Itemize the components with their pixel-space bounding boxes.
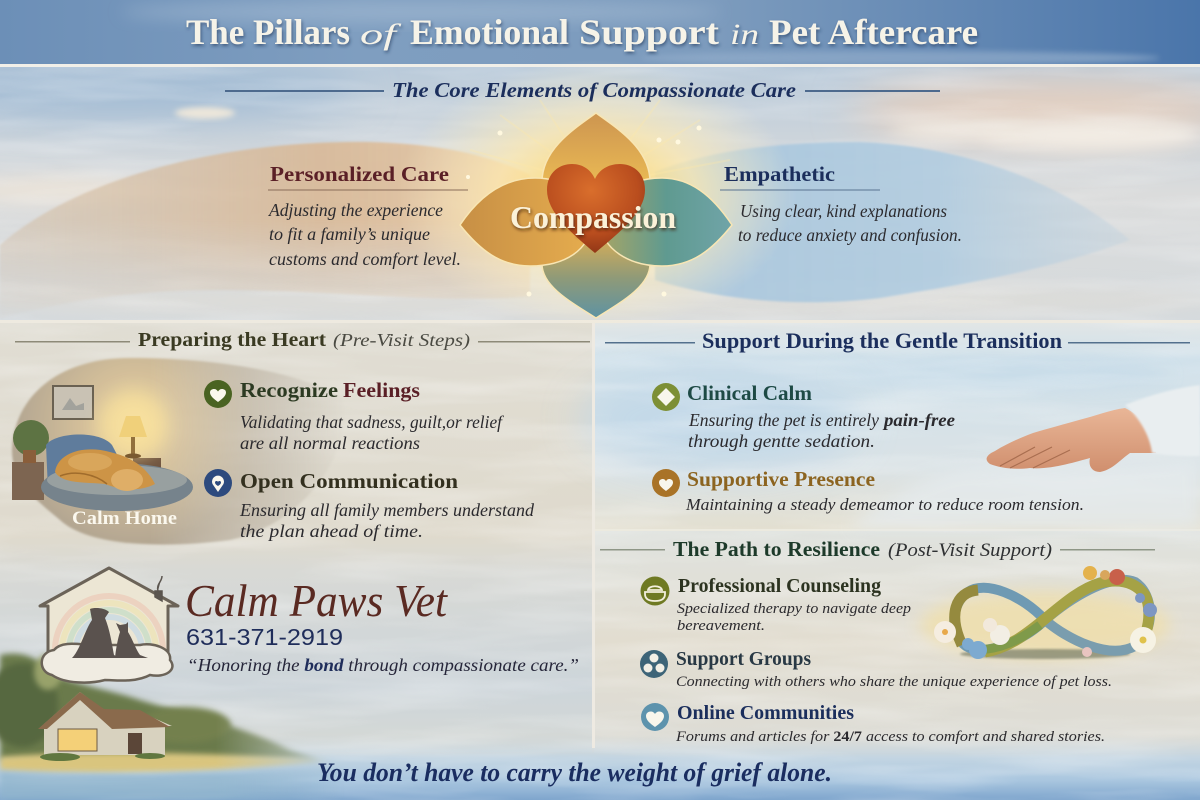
title: Pet Aftercare (769, 12, 978, 52)
title banner (0, 0, 1200, 67)
label: compassion: Compassion (510, 199, 676, 235)
icon: golden glow (396, 60, 796, 330)
icon: supportive presence (652, 469, 680, 497)
item: professional counseling: bereavement. (677, 618, 765, 634)
illustration: hand on blanket (850, 385, 1200, 528)
logo: calm paws house (40, 568, 178, 683)
label: calm home: Calm Home (72, 508, 177, 529)
item: recognize feelings: Validating that sadness, guilt,or relief (240, 412, 504, 432)
rainbow (55, 596, 163, 650)
tagline: “Honoring the bond through compassionate care.” (187, 655, 579, 675)
heading: path to resilience: (Post-Visit Support) (888, 541, 1052, 561)
title: of (360, 18, 402, 51)
illustration: landscape with trees (0, 654, 340, 800)
item: recognize feelings: Recognize (240, 378, 338, 402)
cat on roof (155, 576, 162, 601)
heading: path to resilience: The Path to Resilience (673, 537, 880, 561)
brand: calm paws vet (185, 575, 579, 675)
panel edges (0, 320, 1200, 748)
item: professional counseling: Professional Counseling (678, 576, 881, 597)
item: recognize feelings (240, 378, 504, 453)
title: The Pillars (186, 12, 350, 52)
small dog (115, 622, 148, 658)
heading: preparing the heart: (Pre-Visit Steps) (333, 330, 470, 351)
hand (987, 408, 1156, 472)
item: recognize feelings: are all normal reactions (240, 433, 420, 453)
plant (13, 420, 49, 463)
item: professional counseling: Specialized therapy to navigate deep (677, 601, 912, 617)
panel: path to resilience background (594, 531, 1200, 753)
item: support groups: Support Groups (676, 649, 811, 670)
petal: bottom (542, 238, 650, 318)
illustration: floral infinity (920, 566, 1170, 659)
item: support groups: Connecting with others who share the unique experience of pet loss. (676, 674, 1112, 690)
title: in (730, 18, 759, 51)
picture frame (53, 386, 93, 419)
petal: right (600, 178, 732, 266)
house (40, 568, 178, 658)
item: recognize feelings: Feelings (343, 378, 420, 402)
lamp (99, 391, 167, 459)
icon: clinical calm (652, 383, 680, 411)
item: clinical calm: Ensuring the pet is entirely (688, 410, 879, 430)
item: supportive presence: Supportive Presence (687, 467, 875, 491)
block: personalized care: Adjusting the experience (268, 200, 443, 220)
side table left (12, 462, 44, 500)
panel: core elements sky (0, 62, 1200, 322)
item: clinical calm (687, 381, 955, 451)
icon: online communities (641, 703, 669, 731)
ground (0, 753, 330, 772)
heading: path to resilience (600, 537, 1155, 561)
icon: open communication (204, 469, 232, 497)
footer band (0, 735, 1200, 800)
panel: preparing the heart background (0, 322, 592, 752)
illustration: calm home (12, 358, 345, 545)
illustration: clinic house (38, 692, 172, 761)
block: empathetic: to reduce anxiety and confusion. (738, 225, 962, 245)
trees (0, 654, 320, 760)
shape: personalized care lens (0, 142, 530, 318)
heading: core elements: The Core Elements of Compassionate Care (392, 78, 796, 102)
block: empathetic: Empathetic (724, 162, 835, 186)
dog bed (41, 434, 193, 511)
big dog (72, 608, 120, 658)
petal: left (460, 178, 592, 266)
brand: calm paws vet: Calm Paws Vet (185, 575, 448, 626)
icon: support groups (640, 650, 668, 678)
item: open communication: Open Communication (240, 469, 458, 493)
cloud (42, 644, 172, 683)
item: supportive presence (685, 467, 1084, 514)
item: clinical calm: pain-free (882, 410, 955, 430)
item: online communities (675, 703, 1105, 745)
icon: heart (547, 164, 645, 253)
title: Support (579, 12, 719, 52)
item: support groups (676, 649, 1112, 690)
block: personalized care (268, 162, 468, 269)
item: professional counseling (677, 576, 912, 634)
table right (133, 458, 161, 472)
title: Emotional (410, 12, 569, 52)
block: empathetic (720, 162, 962, 245)
sleeping dog (55, 449, 155, 491)
room vignette (12, 358, 345, 545)
closing message: You don’t have to carry the weight of grief alone. (317, 758, 832, 787)
block: empathetic: Using clear, kind explanations (740, 201, 947, 221)
block: personalized care: to fit a family’s unique (269, 224, 430, 244)
icon: recognize feelings (204, 380, 232, 408)
heading: preparing the heart: Preparing the Heart (138, 329, 326, 351)
item: open communication (239, 469, 534, 541)
sleeve (1125, 385, 1200, 456)
item: clinical calm: through gentte sedation. (688, 431, 875, 451)
heading: preparing the heart (15, 329, 590, 351)
sheet (850, 455, 1200, 528)
shape: empathetic lens (655, 142, 1130, 302)
panel: gentle transition background (580, 322, 1200, 530)
flowers (934, 566, 1157, 659)
item: open communication: the plan ahead of time. (240, 521, 423, 541)
phone: 631-371-2919 (186, 624, 343, 650)
petal: top (542, 113, 650, 205)
compassion flower (396, 60, 796, 330)
item: open communication: Ensuring all family members understand (239, 500, 534, 520)
heading: gentle transition: Support During the Gentle Transition (702, 328, 1062, 353)
item: online communities: Online Communities (677, 703, 854, 724)
icon: professional counseling (640, 576, 670, 606)
item: supportive presence: Maintaining a steady demeamor to reduce room tension. (685, 495, 1084, 514)
title (186, 12, 978, 52)
block: personalized care: Personalized Care (270, 162, 449, 186)
block: personalized care: customs and comfort level. (269, 249, 461, 269)
item: clinical calm: Clinical Calm (687, 381, 813, 405)
item: online communities: Forums and articles for 24/7 access to comfort and shared stories. (675, 729, 1105, 745)
